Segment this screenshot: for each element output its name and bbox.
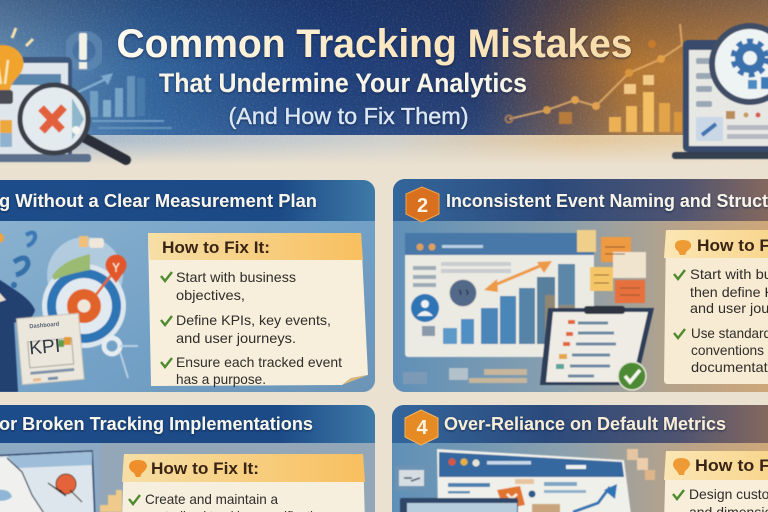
panel 3 heading: or Broken Tracking Implementations <box>0 414 313 434</box>
panel 1 fix list: Ensure each tracked event <box>176 354 342 370</box>
panel 3 fix card <box>122 454 365 512</box>
panel 3 fix list <box>129 491 327 512</box>
panel 3 fix heading: How to Fix It: <box>151 459 259 478</box>
panel 1 fix list: has a purpose. <box>176 371 266 387</box>
panel 1 fix card <box>148 233 368 387</box>
panel 2 heading: Inconsistent Event Naming and Struct <box>446 191 768 211</box>
panel 1 fix heading: How to Fix It: <box>162 238 270 257</box>
illustration: faint bar chart left <box>76 73 172 129</box>
panel 1 fix list: Start with business <box>176 269 296 285</box>
illustration: default analytics dashboard <box>395 449 655 512</box>
panel 1: no clear measurement plan <box>0 180 375 392</box>
panel 1 heading: g Without a Clear Measurement Plan <box>0 191 317 211</box>
panel 4 fix list <box>673 486 768 512</box>
header banner <box>0 0 768 165</box>
panel 2 fix list: documentati <box>691 359 768 375</box>
panel 2: inconsistent event naming <box>393 179 768 392</box>
title <box>116 22 632 98</box>
panel 1 fix list <box>161 269 342 387</box>
panel 2 fix list <box>674 266 768 375</box>
icon: lightbulb <box>129 460 147 477</box>
panel 1 heading bar <box>0 180 375 221</box>
illustration: dashboard with bars and confused bug <box>403 230 654 390</box>
panel 2 number badge: 2 <box>417 195 428 217</box>
panel 3 heading bar <box>0 405 375 443</box>
panel 4 number badge: 4 <box>416 417 428 439</box>
illustration: broken site map with bug <box>0 451 122 512</box>
KPI label: KPI <box>28 336 61 359</box>
report caption: Dashboard <box>29 322 60 330</box>
icon: lightbulb <box>673 458 690 475</box>
panel 1 fix list: objectives, <box>176 287 245 303</box>
panel 4 fix card <box>664 451 768 512</box>
panel 2 fix card <box>664 230 768 384</box>
panel 3 fix list: Create and maintain a <box>145 491 278 507</box>
illustration: growth line chart on the right <box>506 24 682 132</box>
panel 4 heading bar <box>392 405 768 443</box>
panel 4 heading: Over-Reliance on Default Metrics <box>444 414 726 434</box>
panel 3: missing or broken tracking <box>0 405 375 512</box>
panel 2 fix heading: How to F <box>697 236 768 255</box>
panel 2 number badge <box>406 187 439 222</box>
panel 4: over-reliance on default metrics <box>392 405 768 512</box>
panel 4 fix heading: How to F <box>695 456 768 475</box>
illustration: laptop with gear magnifier <box>672 26 768 159</box>
title: Common Tracking Mistakes <box>116 22 632 66</box>
subtitle note: (And How to Fix Them) <box>228 103 468 129</box>
panel 1 fix list: Define KPIs, key events, <box>176 312 331 328</box>
subtitle: That Undermine Your Analytics <box>159 68 527 98</box>
illustration: target, KPI report and confused person <box>0 233 138 392</box>
illustration: gear and exclamation mark <box>68 33 100 69</box>
illustration: laptop with magnifier and lightbulb <box>0 28 126 162</box>
icon: lightbulb <box>675 240 691 255</box>
panel 2 fix list: Start with bu <box>690 266 768 282</box>
panel 1 fix list: and user journeys. <box>176 330 296 346</box>
panel 4 number badge <box>405 410 438 445</box>
panel 2 fix list: conventions <box>691 342 764 358</box>
panel 2 heading bar <box>393 179 768 221</box>
